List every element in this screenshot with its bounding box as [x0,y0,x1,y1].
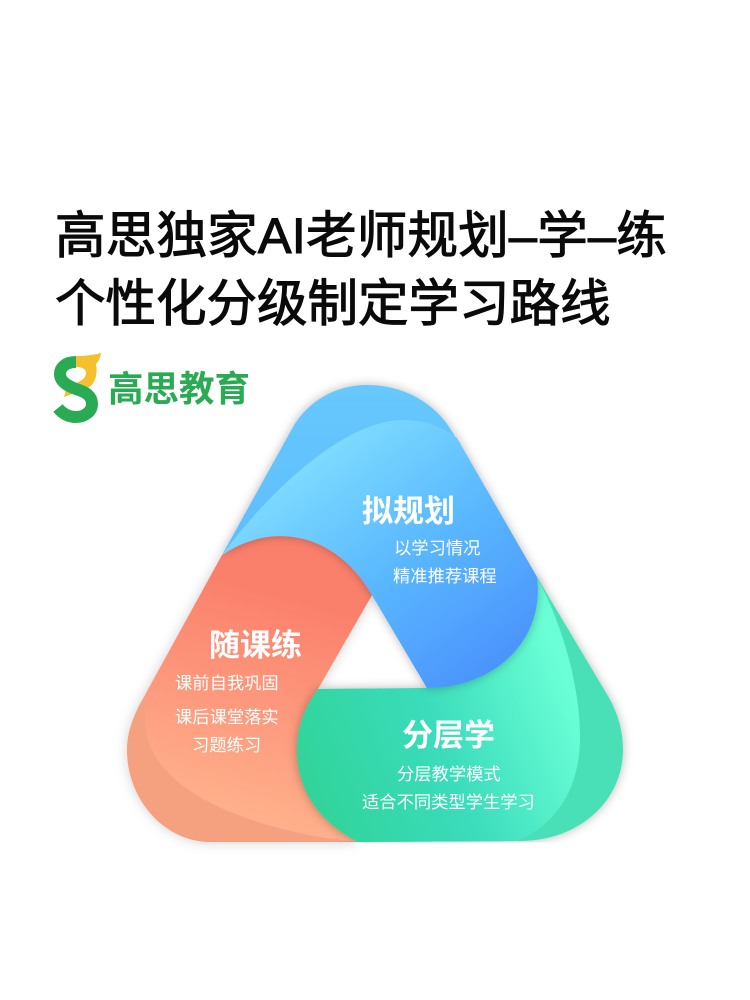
heading: 拟规划: 拟规划 [362,494,455,529]
title: 高思独家AI老师规划–学–练 [55,207,667,264]
text: 分层学 description: 分层教学模式 [397,764,501,784]
panel: 分层学 (green) [297,577,623,842]
text: 随课练 description: 课后课堂落实 [175,707,279,727]
panel: 拟规划 (blue) [222,385,538,688]
text: 随课练 description: 课前自我巩固 [175,673,279,693]
heading: 分层学: 分层学 [402,718,495,753]
panel: 随课练 (red) [127,536,372,842]
text: 随课练 description: 习题练习 [192,735,261,755]
text: 随课练 description [175,673,279,755]
text: 拟规划 description: 精准推荐课程 [393,566,497,586]
text: 分层学 description: 适合不同类型学生学习 [362,792,535,812]
text: 分层学 description [362,764,535,812]
text: 拟规划 description [393,538,497,586]
triangle diagram [122,380,628,848]
text: 拟规划 description: 以学习情况 [394,538,480,558]
title [55,207,667,332]
logo wordmark: 高思教育 [108,369,250,409]
logo mark [58,353,101,417]
heading: 随课练: 随课练 [209,628,302,663]
title: 个性化分级制定学习路线 [55,275,610,332]
